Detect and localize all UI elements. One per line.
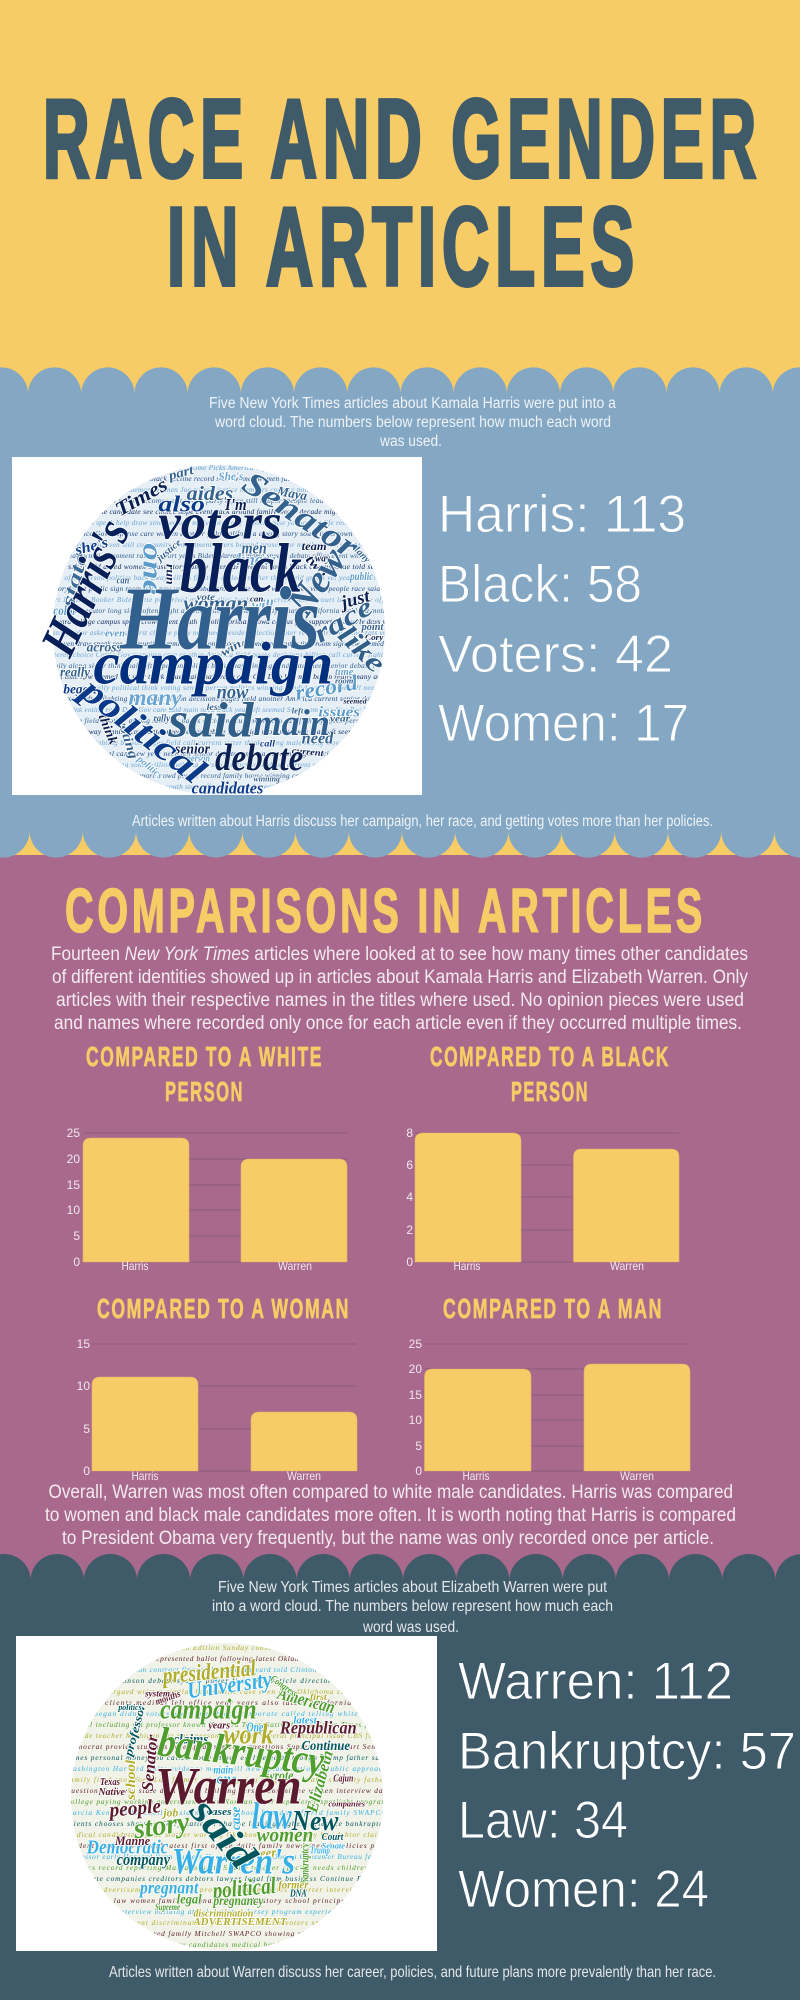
word cloud: Warren: legal bbox=[177, 1891, 202, 1906]
word cloud: Harris: point bbox=[361, 622, 385, 633]
panel: comparisons background bbox=[0, 855, 800, 1585]
word cloud: Harris: voters bbox=[158, 493, 282, 549]
word cloud: Harris: Cory bbox=[365, 633, 384, 642]
word cloud: Warren: Supreme CBS interview building attack national Jersey program experience Dean voter bbox=[67, 1907, 387, 1916]
comparisons intro paragraph: and names where recorded only once for each article even if they occurred multiple times. bbox=[54, 1013, 742, 1034]
word cloud: Harris: political bbox=[71, 667, 215, 792]
word cloud: Harris: time bbox=[335, 667, 354, 678]
word cloud: Warren: politics bbox=[117, 1703, 142, 1712]
word cloud: Harris: person bbox=[186, 754, 210, 765]
word cloud: Harris: many bbox=[128, 685, 182, 711]
word cloud: Warren: Continue bbox=[302, 1738, 350, 1753]
word cloud: Warren: court cases law women family pregnant fired told story school principal principal bbox=[67, 1896, 387, 1905]
word cloud: Warren: company bbox=[117, 1850, 171, 1869]
chart title bbox=[86, 1041, 323, 1107]
word cloud: Harris: one bbox=[136, 543, 167, 595]
word cloud: Warren: pregnancy bbox=[212, 1893, 263, 1908]
axis labels bbox=[406, 1126, 644, 1273]
chart title: PERSON bbox=[165, 1076, 244, 1107]
Warren intro text: word was used. bbox=[362, 1619, 459, 1636]
word cloud: Warren: bankruptcy bbox=[298, 1843, 311, 1883]
Warren word counts: Law: 34 bbox=[458, 1791, 628, 1850]
word cloud: Harris: senior bbox=[174, 741, 210, 757]
word cloud: Harris: family along sister think male often person politics back away winning candidates need senior debate record bbox=[47, 661, 394, 670]
chart title: COMPARED TO A WHITE bbox=[86, 1041, 323, 1072]
word cloud: Warren: Monday ancestry added represented ballot following latest Oklahoma later criticism daily bbox=[66, 1654, 387, 1663]
word cloud: Warren: Republican bbox=[279, 1717, 357, 1737]
word cloud: Warren: One bbox=[247, 1720, 263, 1735]
chart: compared to a white person bbox=[67, 1041, 347, 1273]
word cloud: Harris: Times bbox=[111, 473, 172, 521]
Harris intro text: Five New York Times articles about Kamala Harris were put into a bbox=[209, 395, 616, 412]
chart title: COMPARED TO A BLACK bbox=[430, 1041, 670, 1072]
word cloud: Harris: think bbox=[96, 712, 121, 747]
word cloud: Warren: public began didn't voters want later black corporate called telling white Center bbox=[66, 1709, 387, 1718]
word cloud: Harris: money night asked office Bernie black decline record state women women family white history court real plan bbox=[47, 474, 394, 483]
comparisons conclusion paragraph bbox=[45, 1482, 736, 1549]
word cloud: Harris: said bbox=[167, 692, 254, 748]
word cloud: Warren: Native bbox=[97, 1787, 126, 1798]
word cloud: Harris: poll Yet Clark case candidate see choice hope event back around family world decade might better look told bbox=[46, 507, 394, 516]
word cloud: Harris: across bbox=[87, 640, 122, 655]
Harris intro text: was used. bbox=[379, 433, 442, 450]
word cloud: Harris: way bbox=[315, 554, 331, 565]
chart title bbox=[430, 1041, 670, 1107]
word cloud: Harris: vote bbox=[197, 593, 215, 603]
comparisons intro paragraph: Fourteen New York Times articles where looked at to see how many times other candidates bbox=[51, 944, 748, 965]
word cloud: Warren: political bbox=[210, 1873, 277, 1904]
comparisons intro paragraph: articles with their respective names in the titles where used. No opinion pieces were used bbox=[56, 990, 744, 1011]
word cloud: Harris: color bbox=[53, 603, 77, 618]
word cloud: Warren: advisor advertisement wealth tax proposal plan policies reporter interview spoke bbox=[67, 1885, 387, 1894]
chart title: COMPARED TO A MAN bbox=[443, 1293, 663, 1324]
word cloud: Harris: men bbox=[242, 538, 267, 557]
word cloud: Harris: Harris bbox=[119, 569, 320, 668]
word cloud: Warren: Garcia advertisement discrimination government clients voters spoke public-school bbox=[67, 1918, 387, 1927]
Harris intro text: word cloud. The numbers below represent how much each word bbox=[214, 414, 611, 431]
word cloud: Warren: family filed spot York Law former released going biography really stability father bbox=[67, 1775, 387, 1784]
word cloud: Warren: corporate companies creditors debtors lawyer legal firm business Continue Reading bbox=[67, 1874, 387, 1883]
word cloud: Warren: question employee state data attack building Jersey Committee women interview day bbox=[67, 1786, 387, 1795]
word cloud: Warren: months bbox=[154, 1689, 182, 1708]
word cloud: Warren: University bbox=[186, 1667, 274, 1704]
word cloud: Warren: case bbox=[228, 1807, 243, 1830]
word cloud: Warren: cases bbox=[207, 1807, 232, 1818]
word cloud: Warren: women bbox=[257, 1825, 313, 1847]
word cloud: Harris: justice bbox=[153, 537, 184, 565]
bar: Warren 7 bbox=[251, 1412, 357, 1471]
Warren intro text: Five New York Times articles about Elizabeth Warren were put bbox=[218, 1579, 607, 1596]
Warren word counts: Warren: 112 bbox=[458, 1652, 733, 1711]
word cloud: Harris: room bbox=[335, 676, 354, 685]
Harris word cloud image panel bbox=[12, 457, 422, 795]
word cloud: Harris: woman bbox=[183, 593, 248, 615]
panel: Warren word cloud section bbox=[0, 1554, 800, 2000]
word cloud: Harris: entered choice Gov response care women another field California among story south local town across three bbox=[47, 529, 394, 538]
axis labels: 4 bbox=[406, 1190, 413, 1204]
panel: yellow title header bbox=[0, 0, 800, 856]
chart: compared to a black person bbox=[406, 1041, 679, 1273]
word cloud: Harris: politics often fighting billion pages field call current sister think voting male Along Gov Dem rally track bbox=[46, 738, 394, 747]
word cloud: Harris: winning bbox=[253, 775, 280, 784]
Harris word counts bbox=[438, 485, 689, 753]
word cloud: Harris: state bbox=[57, 549, 93, 611]
comparisons conclusion paragraph: to President Obama very frequently, but the name was only recorded once per article. bbox=[62, 1528, 714, 1549]
word cloud: Warren: students court home told latest first office daily family news speech policies plan bbox=[67, 1841, 387, 1850]
word cloud: Warren: clients chooses showing Kerry national change leading highest evidence bankruptcy bbox=[67, 1819, 387, 1828]
word cloud: Warren: latest bbox=[293, 1715, 318, 1726]
word cloud: Warren: Mr history argued written similar home white case even debt Oklahoma country court bbox=[66, 1687, 388, 1696]
word cloud: Harris: Along sister told asked women house story family later early recent south black caucus issue told see first bbox=[46, 562, 394, 571]
word cloud: Harris: Along think voting rally Dem Gov care said main need track year left seemed Sign room time Nov Bay Day issue bbox=[46, 705, 394, 714]
word cloud: Warren: work bbox=[223, 1719, 273, 1750]
word cloud: Warren: Times personal money job called home attack early elected though Trump father said bbox=[67, 1753, 387, 1762]
axis labels: 20 bbox=[67, 1152, 80, 1166]
Warren word cloud image panel bbox=[16, 1636, 437, 1951]
word cloud: Harris: can bbox=[117, 575, 130, 586]
word cloud: Harris: Many bbox=[347, 540, 373, 566]
word cloud: Warren: main bbox=[213, 1763, 233, 1776]
bar: Warren 21 bbox=[584, 1364, 690, 1471]
chart title: PERSON bbox=[511, 1076, 589, 1107]
chart: compared to a man bbox=[409, 1293, 690, 1483]
word cloud: Warren: system bbox=[144, 1690, 170, 1700]
word cloud: Harris: team bbox=[302, 540, 327, 553]
axis labels: 5 bbox=[83, 1422, 90, 1436]
word cloud: Warren: school bbox=[123, 1760, 138, 1801]
word cloud: Harris: history point public sign room time new vote member group state black women men voter people race said can bbox=[47, 584, 394, 593]
word cloud: Harris: color history take even still community commitment voters beyond prosecutor member attorney general seen bbox=[47, 540, 394, 549]
word cloud: Warren: New bbox=[291, 1806, 338, 1837]
word cloud: Warren: Texas bbox=[100, 1777, 120, 1788]
word cloud: Harris: really bbox=[60, 665, 90, 680]
word cloud: Harris: will bbox=[252, 598, 274, 614]
word cloud: Warren: story bbox=[131, 1807, 192, 1845]
word cloud: Harris: win bbox=[218, 637, 244, 659]
word cloud: Harris: entered choice Cattle Gov response care another America field pages decisions billion call current fighting bbox=[47, 650, 394, 659]
Warren intro text: into a word cloud. The numbers below represent how much each bbox=[212, 1598, 613, 1615]
word cloud: Warren: issue black Johnson debate system power first Dan article director across family bbox=[67, 1676, 387, 1685]
axis labels: Warren bbox=[278, 1259, 312, 1273]
word cloud: Warren: federal including yet professor known Harvard Texas Native family Cajun Times family bbox=[67, 1720, 387, 1729]
word cloud: Warren: campaign bbox=[160, 1694, 257, 1725]
word cloud: Harris: also bbox=[158, 492, 205, 518]
axis labels: 0 bbox=[415, 1464, 422, 1478]
bar: Harris 20 bbox=[424, 1369, 531, 1471]
bar: Harris 8 bbox=[415, 1133, 521, 1262]
word cloud: Warren: years bbox=[207, 1720, 230, 1731]
word cloud: Harris: still even draw speak see community commitment among voters beyond prosecutor time room sign new seemed go bbox=[47, 639, 394, 648]
word cloud: Warren: Manne bbox=[114, 1834, 150, 1848]
word cloud: Warren: Senate bbox=[322, 1841, 345, 1850]
word cloud: Warren: DNA bbox=[289, 1889, 307, 1900]
word cloud: Warren: industry family billion contract financial record Harvard told Clinton state lawyer policy bbox=[67, 1665, 387, 1674]
word cloud: Harris: response care rally political think voting senior person politics winning candidates current call need new bbox=[47, 683, 393, 692]
axis labels: 15 bbox=[409, 1388, 422, 1402]
word cloud: Warren: President Kennedy offered family Mitchell SWAPCO showing chooses highest leading bbox=[66, 1929, 387, 1938]
axis labels: 5 bbox=[73, 1229, 80, 1243]
word cloud: Harris: left bbox=[292, 706, 304, 715]
word cloud: Harris: aides bbox=[187, 483, 234, 505]
word cloud: Harris: sister male often fighting back away billion decisions pages field another America current senior debate go bbox=[47, 694, 394, 703]
word cloud: Warren: wrote bbox=[267, 1768, 293, 1783]
word cloud: Harris: even bbox=[105, 629, 125, 640]
word cloud: Warren: discrimination bbox=[193, 1909, 253, 1920]
word cloud: Harris: need bbox=[302, 728, 334, 747]
word cloud: Warren: American bbox=[275, 1683, 337, 1717]
word cloud: Harris: run bbox=[164, 564, 177, 585]
axis labels: 5 bbox=[415, 1439, 422, 1453]
word cloud: Harris: main bbox=[253, 702, 330, 743]
word cloud: Harris: seemed bbox=[342, 696, 367, 705]
word cloud: Warren: job bbox=[161, 1807, 178, 1820]
word cloud: Harris: sister male field another among America pages decisions current billion call fighting often person politics bbox=[47, 716, 393, 725]
word cloud: Warren: outside teacher Michigan big past personal updated several principal issue CBS future bbox=[67, 1731, 387, 1740]
word cloud: Warren: ADVERTISEMENT bbox=[192, 1917, 287, 1928]
Warren intro text bbox=[212, 1579, 613, 1636]
word cloud: Harris: now bbox=[217, 681, 249, 703]
word cloud: Harris: she's bbox=[73, 535, 110, 559]
word cloud: Harris: room time new seemed left year track issues said main rally care Gov Dem less now began really many across bbox=[47, 672, 393, 681]
word cloud: Warren: law bbox=[252, 1795, 292, 1837]
Harris word counts: Harris: 113 bbox=[438, 485, 686, 544]
comparisons conclusion paragraph: Overall, Warren was most often compared to white male candidates. Harris was compared bbox=[48, 1482, 733, 1503]
word cloud: Harris: decade prosecutor long since often might around white national identity senator California Oakland mother bbox=[47, 606, 393, 615]
word cloud: Harris: part bbox=[166, 462, 196, 483]
axis labels: 10 bbox=[77, 1379, 90, 1393]
word cloud: Warren: Democratic bbox=[86, 1836, 168, 1858]
word cloud: Warren: career bbox=[242, 1844, 278, 1862]
word cloud: Warren: Cajun bbox=[333, 1774, 354, 1785]
axis labels: Warren bbox=[610, 1259, 644, 1273]
axis labels: 0 bbox=[73, 1255, 80, 1269]
bar: Warren 20 bbox=[241, 1159, 347, 1262]
word cloud: Harris: began bbox=[63, 681, 97, 696]
bar: Harris 24 bbox=[83, 1138, 189, 1262]
axis labels: 0 bbox=[406, 1255, 413, 1269]
bar: Warren 7 bbox=[574, 1149, 679, 1262]
chart: compared to a woman bbox=[77, 1293, 357, 1483]
word cloud: Harris: Maya bbox=[275, 483, 309, 503]
word cloud: Harris: away back swing winning south billion fighting person politics candidates current women move state record bbox=[47, 760, 394, 769]
axis labels: 15 bbox=[67, 1178, 80, 1192]
word cloud: Warren: change national evidence Kerry candidates medical bankruptcy debtor mother claims bbox=[67, 1940, 387, 1949]
axis labels: 25 bbox=[409, 1337, 422, 1351]
word cloud: Warren: Warren's bbox=[172, 1840, 295, 1881]
Harris word counts: Voters: 42 bbox=[438, 625, 673, 684]
word cloud: Harris bbox=[29, 462, 394, 797]
word cloud: Warren: Elizabeth bbox=[302, 1748, 337, 1815]
axis labels: 25 bbox=[67, 1126, 80, 1140]
axis labels: Warren bbox=[620, 1469, 654, 1483]
word cloud: Harris: part Joe talk Booker Biden Pete plan rival attack policy health care crime police court law justice office bbox=[46, 595, 394, 604]
panel: comparisons content bbox=[45, 877, 748, 1549]
word cloud: Harris: New bbox=[277, 539, 355, 624]
word cloud: Warren: Court bbox=[322, 1832, 344, 1843]
Harris word counts: Black: 58 bbox=[438, 555, 642, 614]
word cloud: Warren: claims bbox=[173, 1731, 208, 1746]
chart title: COMPARED TO A WOMAN bbox=[97, 1293, 350, 1324]
axis labels: 2 bbox=[406, 1223, 413, 1237]
axis labels bbox=[409, 1337, 654, 1483]
word cloud: Harris: She's bbox=[218, 470, 244, 483]
word cloud: Harris: male often person politics back away billion fighting called another think field group yet year month week bbox=[47, 573, 394, 582]
axis labels: Harris bbox=[454, 1259, 480, 1273]
comparisons intro paragraph: of different identities showed up in articles about Kamala Harris and Elizabeth Warren. Only bbox=[52, 967, 748, 988]
Harris intro text bbox=[209, 395, 616, 450]
scalloped blue background bbox=[0, 367, 800, 858]
axis labels bbox=[77, 1337, 321, 1483]
word cloud: Harris: politics bbox=[134, 753, 165, 782]
word cloud: Harris: Howard college campus speak crowd event South Carolina primary Iowa caucus poll support lead early days win bbox=[46, 617, 394, 626]
axis labels: 10 bbox=[409, 1413, 422, 1427]
word cloud: Harris: current bbox=[291, 746, 324, 759]
word cloud: Harris: candidates bbox=[192, 778, 263, 797]
comparisons intro paragraph bbox=[51, 944, 748, 1034]
word cloud: Warren: bankruptcy bbox=[155, 1719, 327, 1785]
word cloud: Harris: college amount sign play memory women Joe reason justice members country poll speech white leader many bbox=[47, 485, 394, 494]
word cloud: Harris: less bbox=[207, 703, 222, 713]
word cloud: Warren: professor early Harvard Penn Rutgers Houston Congress Obama Consumer Bureau family bbox=[66, 1852, 387, 1861]
axis labels: 10 bbox=[67, 1203, 80, 1217]
axis labels: 20 bbox=[409, 1362, 422, 1376]
word cloud: Harris: just bbox=[336, 585, 373, 613]
word cloud: Harris: wants leader nation moment rally support years Biden Warren Obama speech debate office event white top next bbox=[47, 551, 394, 560]
word cloud: Harris: two bbox=[303, 552, 331, 580]
axis labels: 0 bbox=[83, 1464, 90, 1478]
word cloud: Harris: record bbox=[293, 670, 360, 705]
word cloud: Harris: group event speech leader support crowd people record family house winning candidates south plan office day bbox=[47, 771, 394, 780]
word cloud: Warren: Washington Harvard white evidence made will News plans national public approach bbox=[67, 1764, 387, 1773]
word cloud: Harris: like bbox=[332, 620, 391, 679]
word cloud: Harris: I'm bbox=[224, 495, 247, 514]
word cloud: Warren bbox=[66, 1643, 388, 1951]
word cloud: Harris: issues bbox=[318, 705, 360, 721]
word cloud: Warren: historically Massachusetts Quinn Edition Sunday conservative economics Mayor plans bbox=[67, 1643, 387, 1652]
word cloud: Harris: black bbox=[180, 531, 302, 608]
word cloud: Warren: Congress bbox=[268, 1673, 299, 1700]
word cloud: Harris: voting bbox=[114, 716, 142, 761]
word cloud: Harris: family back away winning candidates need senior debate track Sign room time new year left seemed rally care bbox=[47, 727, 394, 736]
word cloud: Harris: away swing back candidates winning south state office plan people record vote house leader event speech top bbox=[47, 782, 394, 791]
word cloud: Harris: debate bbox=[215, 737, 303, 779]
word cloud: Warren: companies bbox=[328, 1800, 365, 1809]
Warren word counts: Women: 24 bbox=[458, 1860, 709, 1919]
word cloud: Warren: professor bbox=[122, 1702, 149, 1759]
word cloud: Warren: medical candidates spoke mother working Oklahoma white country law debtor claims bbox=[67, 1830, 387, 1839]
word cloud: Warren: former bbox=[278, 1878, 309, 1891]
word cloud: Harris: year bbox=[329, 715, 350, 725]
word cloud: Harris: history color asked woman first chance party nominee president election voter reason Trump democrats year bbox=[47, 628, 393, 637]
word cloud: Harris: Harris's bbox=[29, 510, 141, 665]
axis labels: Warren bbox=[287, 1469, 321, 1483]
comparisons conclusion paragraph: to women and black male candidates more often. It is worth noting that Harris is compared bbox=[45, 1505, 736, 1526]
word cloud: Warren: teaching clients medical left office year years also latest California Politics bbox=[67, 1698, 387, 1707]
axis labels: Harris bbox=[122, 1259, 148, 1273]
word cloud: Harris: Dad history run know public become want voters party office still support people lead crowd even said race bbox=[46, 496, 394, 505]
panel: Harris word cloud section bbox=[0, 367, 800, 858]
word cloud: Harris: public bbox=[349, 570, 373, 583]
word cloud: Warren: Trump bbox=[310, 1845, 330, 1856]
word cloud: Harris: know bbox=[237, 550, 276, 569]
axis labels: Harris bbox=[132, 1469, 158, 1483]
word cloud: Warren: college paying working government Dean Norman voter experience spotlight program bbox=[67, 1797, 387, 1806]
title bbox=[43, 77, 762, 309]
axis labels bbox=[67, 1126, 312, 1273]
word cloud: Harris: can bbox=[250, 595, 264, 604]
word cloud: Harris: rally bbox=[153, 714, 170, 725]
word cloud: Harris: campaign bbox=[93, 630, 333, 696]
word cloud: Warren: people bbox=[107, 1795, 162, 1822]
word cloud: Warren: presidential bbox=[160, 1655, 257, 1689]
axis labels: 8 bbox=[406, 1126, 413, 1140]
word cloud: Harris: Senator bbox=[236, 464, 366, 567]
word cloud: Warren: first bbox=[310, 1693, 327, 1703]
word cloud: Warren: said bbox=[181, 1788, 267, 1878]
word cloud: Harris: race bbox=[308, 591, 378, 649]
word cloud: Harris: call bbox=[260, 740, 275, 750]
word cloud: Warren: Warren bbox=[155, 1755, 302, 1815]
word cloud: Harris: last Cory room speak help draw since woman made going city school house young first life record voice come bbox=[47, 518, 394, 527]
axis labels: Harris bbox=[462, 1469, 490, 1483]
word cloud: Harris: voting think political care new year need left senior debate America another pages decisions person call go bbox=[47, 749, 394, 758]
Harris word counts: Women: 17 bbox=[438, 694, 689, 753]
scalloped teal background bbox=[0, 1554, 800, 2000]
bar: Harris 11 bbox=[92, 1377, 198, 1471]
word cloud: Warren: politics record reporting Massachusetts Senate teacher special needs children kids bbox=[66, 1863, 387, 1872]
word cloud: Warren: one bbox=[217, 1771, 237, 1787]
word cloud: Warren: Democrat provide students race speak someone questions Supreme ever court Senate bbox=[66, 1742, 387, 1751]
word cloud: Warren: pregnant bbox=[138, 1877, 199, 1897]
word cloud: Warren: Garcia Kennedy Mitchell President public-school Brandon offered family SWAPCO bbox=[67, 1808, 387, 1817]
axis labels: 6 bbox=[406, 1158, 413, 1172]
word cloud: Warren: Supreme bbox=[155, 1903, 180, 1913]
word cloud: Harris: wants message state people home change Dec time Picks America night first call moment years long vote plan bbox=[47, 463, 394, 472]
Warren word counts bbox=[458, 1652, 796, 1919]
axis labels: 15 bbox=[77, 1337, 90, 1351]
word cloud: Warren: Senator bbox=[138, 1733, 162, 1792]
